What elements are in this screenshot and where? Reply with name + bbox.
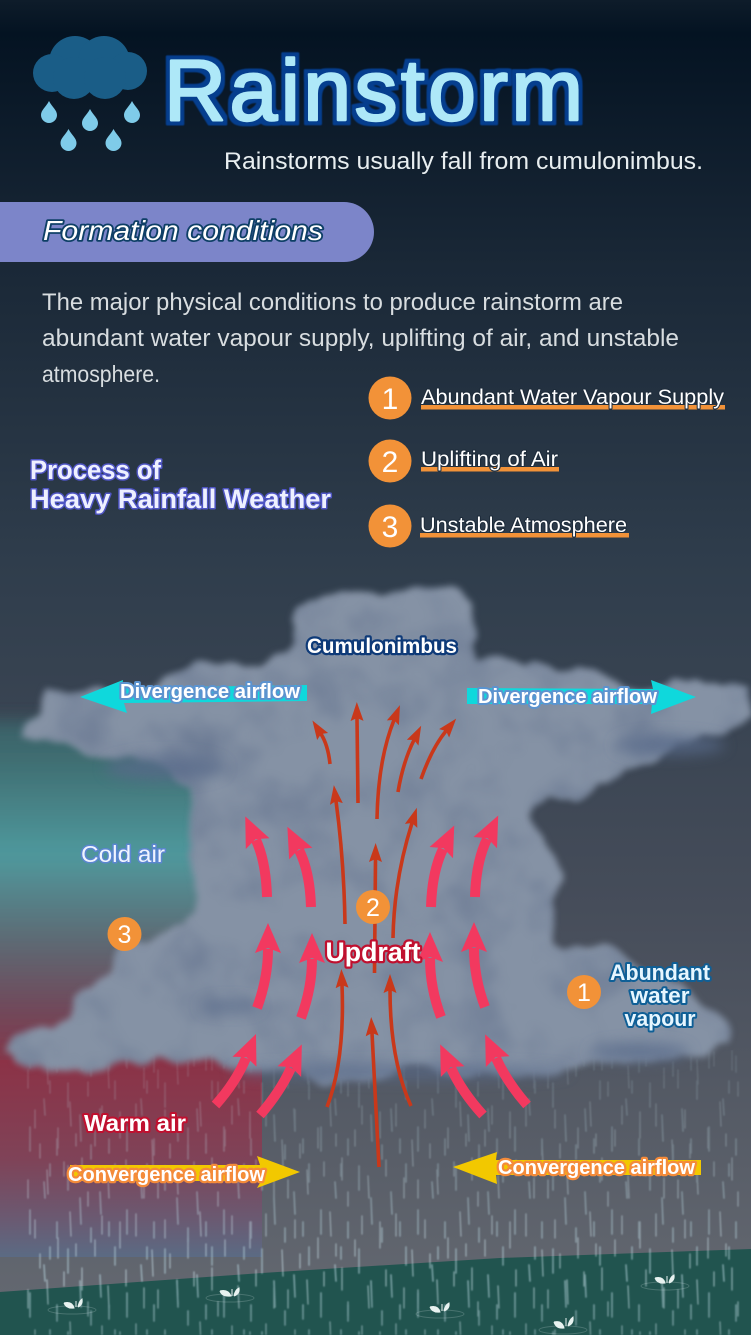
plants on the ground	[48, 1275, 689, 1334]
label: cold air: Cold air	[81, 841, 165, 867]
marker 2: 2	[366, 894, 380, 922]
thick updraft arrows	[216, 839, 527, 1115]
title: Rainstorm	[164, 43, 583, 139]
arrow: divergence airflow right	[467, 680, 696, 714]
item 3: Unstable Atmosphere	[420, 514, 627, 537]
subheading: process of heavy rainfall weather: Heavy Rainfall Weather	[30, 484, 331, 514]
marker 1: 1	[577, 979, 591, 1007]
arrow: convergence airflow right	[453, 1152, 701, 1184]
cold air panel	[0, 720, 225, 1090]
section heading: formation conditions: Formation conditions	[43, 215, 323, 246]
intro paragraph: The major physical conditions to produce rainstorm are	[42, 289, 623, 316]
label: abundant water vapour: Abundant	[610, 960, 711, 985]
item 1: Abundant Water Vapour Supply	[421, 386, 725, 409]
arrow: convergence airflow left	[70, 1156, 300, 1188]
label: abundant water vapour: vapour	[624, 1006, 696, 1031]
numbered list of conditions	[368, 376, 725, 548]
item 1	[368, 376, 725, 420]
marker 3	[108, 917, 142, 951]
label: abundant water vapour: water	[629, 983, 690, 1008]
title block	[33, 36, 703, 175]
marker 3: 3	[118, 921, 131, 949]
rain	[25, 1050, 740, 1335]
marker 1	[567, 975, 601, 1009]
item 2: 2	[382, 446, 398, 479]
label: divergence airflow left: Divergence airflow	[120, 681, 300, 703]
item 1: 1	[382, 383, 398, 416]
warm air panel	[0, 1060, 262, 1257]
label: warm air: Warm air	[84, 1110, 186, 1136]
thin updraft arrows	[321, 718, 446, 1167]
icon: rain cloud	[33, 36, 147, 151]
intro paragraph: abundant water vapour supply, uplifting of air, and unstable	[42, 325, 679, 352]
item 3: 3	[382, 511, 398, 544]
intro paragraph: atmosphere.	[42, 361, 160, 387]
label: abundant water vapour	[610, 960, 711, 1031]
section heading: formation conditions	[0, 202, 374, 262]
label: convergence airflow left: Convergence airflow	[68, 1164, 265, 1186]
subtitle: Rainstorms usually fall from cumulonimbus.	[224, 148, 703, 175]
item 2	[368, 440, 559, 482]
item 2: Uplifting of Air	[421, 448, 558, 471]
subheading: process of heavy rainfall weather: Process of	[30, 455, 162, 485]
subheading: process of heavy rainfall weather	[30, 455, 331, 514]
arrow: divergence airflow left	[80, 680, 307, 713]
item 3	[368, 504, 629, 548]
label: cumulonimbus: Cumulonimbus	[307, 635, 457, 658]
label: updraft: Updraft	[326, 937, 420, 967]
intro paragraph	[42, 289, 679, 387]
label: convergence airflow right: Convergence airflow	[498, 1157, 695, 1179]
cumulonimbus cloud	[5, 585, 751, 1080]
marker 2	[356, 890, 390, 924]
label: divergence airflow right: Divergence airflow	[478, 686, 657, 708]
ground	[0, 1249, 751, 1335]
